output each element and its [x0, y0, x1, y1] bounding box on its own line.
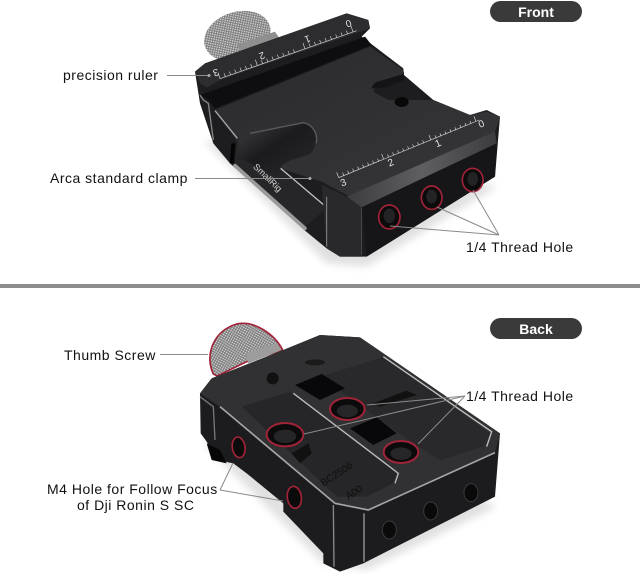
thumb screw knob, red outline — [210, 323, 283, 376]
callout: precision ruler: precision ruler — [63, 67, 158, 83]
engraved model number: A00 — [344, 483, 365, 503]
M4 holes — [231, 436, 303, 509]
side face — [215, 110, 327, 227]
1/4 thread holes, front — [379, 168, 483, 229]
thumb screw knob — [198, 3, 282, 69]
callout: precision ruler — [63, 67, 210, 83]
callout: M4 Hole for Follow Focus — [47, 463, 283, 513]
callout: 1/4 Thread Hole front — [390, 190, 574, 255]
front bevel — [347, 132, 497, 207]
front ruler scale — [337, 116, 487, 189]
badge: Back — [490, 318, 582, 339]
badge: Front: Front — [518, 4, 554, 20]
callout: Arca standard clamp — [50, 170, 312, 186]
callout: 1/4 Thread Hole front: 1/4 Thread Hole — [466, 239, 574, 255]
callout: M4 Hole for Follow Focus: M4 Hole for Follow Focus — [47, 481, 218, 497]
engraved model number: BC2506 — [319, 460, 356, 489]
callout: 1/4 Thread Hole back — [304, 388, 574, 444]
front ruler scale: 0 — [477, 118, 487, 131]
precision ruler rail: 1 — [302, 32, 312, 45]
front ruler scale: 3 — [339, 177, 349, 189]
bottom side holes — [382, 484, 478, 539]
1/4 thread holes, back — [267, 398, 418, 463]
engraved model number — [319, 460, 365, 503]
front ruler scale: 2 — [386, 157, 396, 169]
callout: 1/4 Thread Hole back: 1/4 Thread Hole — [466, 388, 574, 404]
precision ruler rail — [195, 13, 370, 87]
callout: Thumb Screw: Thumb Screw — [64, 347, 156, 363]
callout: M4 Hole for Follow Focus: of Dji Ronin S SC — [77, 497, 194, 513]
front ruler scale: 1 — [434, 138, 443, 150]
section divider — [0, 284, 640, 288]
SmallRig logo: SmallRig — [251, 162, 284, 194]
badge: Front — [490, 1, 582, 22]
product: front view clamp — [195, 3, 500, 267]
precision ruler rail: 0 — [343, 17, 353, 29]
precision ruler rail: 3 — [211, 66, 220, 78]
precision ruler rail: 2 — [257, 49, 266, 61]
badge: Back: Back — [519, 321, 553, 337]
callout: Arca standard clamp: Arca standard clamp — [50, 170, 188, 186]
product: back view clamp — [200, 323, 500, 572]
